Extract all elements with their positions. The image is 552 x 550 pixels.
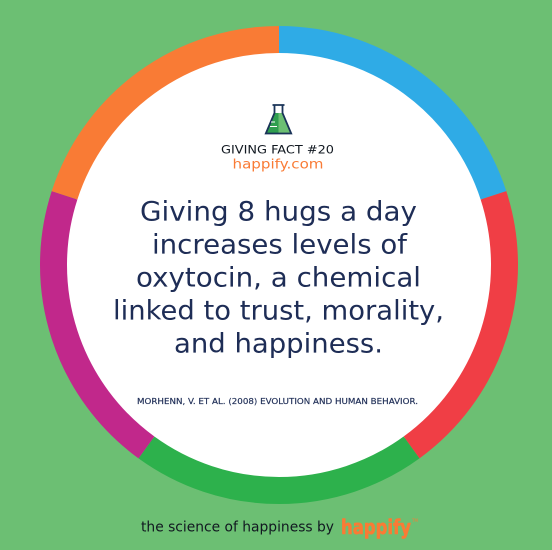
statement line 4: linked to trust, morality, bbox=[113, 296, 444, 326]
statement line 3: oxytocin, a chemical bbox=[136, 262, 421, 294]
icon: flask bbox=[266, 105, 291, 134]
footer logo: happify: happify bbox=[341, 515, 411, 539]
label: giving fact: GIVING FACT #20 bbox=[221, 142, 334, 156]
segment: magenta bbox=[54, 195, 146, 447]
segment: orange bbox=[65, 40, 279, 195]
white center circle bbox=[65, 51, 493, 479]
statement line 2: increases levels of bbox=[152, 230, 409, 260]
trademark mark: TM bbox=[411, 518, 418, 523]
footer tagline: the science of happiness by bbox=[141, 520, 334, 536]
segment: blue bbox=[279, 40, 493, 195]
ring: five coloured segments bbox=[54, 40, 504, 490]
citation: MORHENN, V. ET AL. (2008) EVOLUTION AND HUMAN BEHAVIOR. bbox=[137, 397, 418, 406]
label: happify.com: happify.com bbox=[232, 156, 324, 172]
statement line 5: and happiness. bbox=[174, 328, 383, 360]
segment: green bbox=[146, 447, 412, 490]
segment: red bbox=[412, 195, 504, 447]
main statement bbox=[113, 197, 444, 360]
statement line 1: Giving 8 hugs a day bbox=[140, 197, 417, 228]
